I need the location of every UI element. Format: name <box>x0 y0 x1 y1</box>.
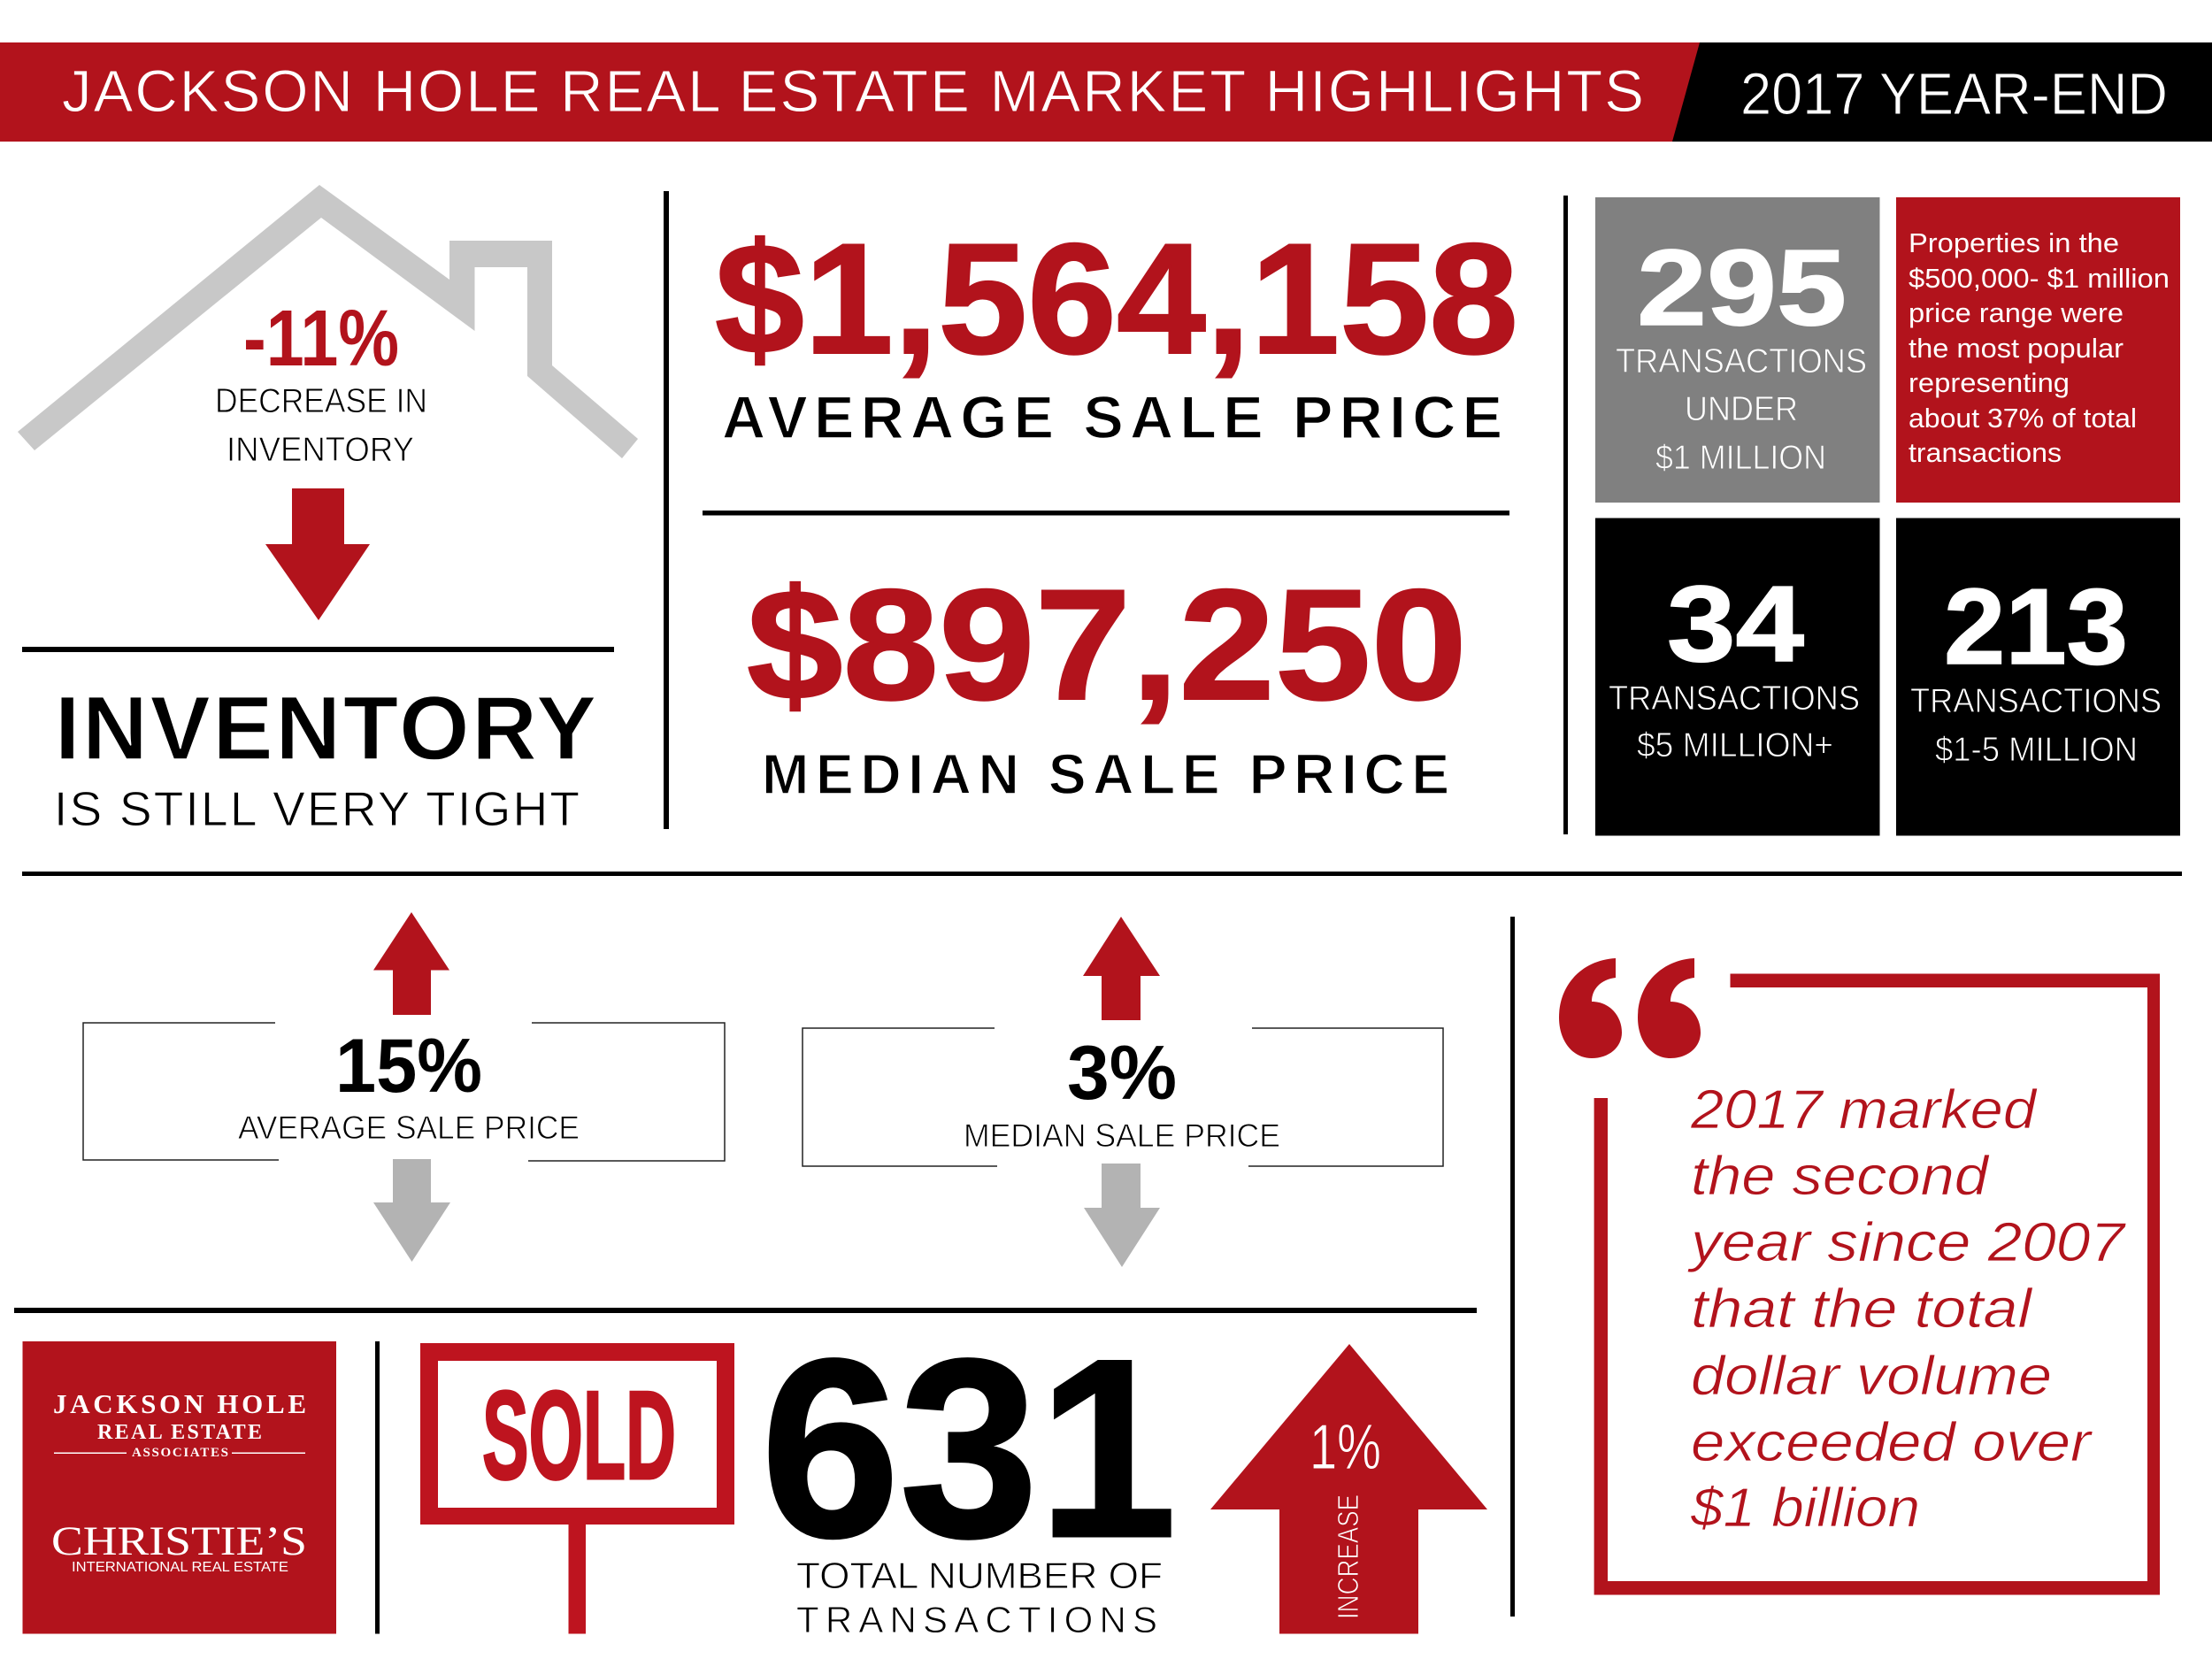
quote frame <box>1594 973 2160 1594</box>
panel: most popular price range: representing <box>1909 367 2070 398</box>
icon: quotation marks <box>1559 958 1701 1058</box>
label: TRANSACTIONS <box>796 1599 1157 1640</box>
panel: inventory <box>18 185 638 836</box>
label: TOTAL NUMBER OF <box>796 1555 1163 1596</box>
panel: transactions under 1 million <box>1595 197 1879 503</box>
panel: sale prices <box>703 211 1518 806</box>
panel: most popular price range: about 37% of total <box>1909 403 2137 434</box>
quote text: the second <box>1691 1146 1991 1207</box>
panel: logos <box>23 1341 336 1633</box>
panel: transactions 1 to 5 million <box>1896 518 2180 835</box>
panel: most popular price range: Properties in the <box>1909 227 2119 258</box>
percentage: 3% <box>1067 1031 1177 1116</box>
decrease label: INVENTORY <box>227 431 414 469</box>
median sale price label: MEDIAN SALE PRICE <box>762 742 1449 806</box>
sold text: SOLD <box>482 1365 676 1506</box>
quote text <box>1687 1079 2127 1539</box>
panel: most popular price range: the most popular <box>1909 333 2124 364</box>
logo: Christie's International Real Estate: INTERNATIONAL REAL ESTATE <box>72 1560 288 1575</box>
quote text: exceeded over <box>1691 1412 2093 1473</box>
icon: house outline <box>18 185 638 458</box>
panel: total transactions <box>761 1306 1177 1640</box>
logo: Jackson Hole Real Estate Associates: JACKSON HOLE <box>53 1388 306 1419</box>
panel: average sale price change <box>83 912 725 1262</box>
one percent: 1% <box>1310 1412 1381 1483</box>
label: MEDIAN SALE PRICE <box>964 1118 1280 1154</box>
quote text: 2017 marked <box>1690 1079 2039 1141</box>
label: TRANSACTIONS <box>1616 342 1867 380</box>
label <box>796 1555 1163 1640</box>
bracket frame <box>803 1028 1443 1166</box>
inventory subheading: IS STILL VERY TIGHT <box>54 781 580 836</box>
decrease label <box>215 382 427 469</box>
label: $1-5 MILLION <box>1935 731 2138 769</box>
number 213: 213 <box>1944 566 2128 687</box>
panel: quote <box>1559 958 2160 1594</box>
icon: large increase arrow <box>1210 1344 1487 1633</box>
icon: red down arrow <box>265 488 370 620</box>
label: UNDER <box>1685 390 1798 428</box>
quote text: dollar volume <box>1691 1346 2052 1407</box>
logo: Jackson Hole Real Estate Associates: ASSOCIATES <box>132 1446 228 1460</box>
label <box>1616 342 1867 477</box>
panel: most popular price range: transactions <box>1909 437 2062 468</box>
panel: most popular price range <box>1896 197 2180 503</box>
icon: red up arrow <box>373 912 449 1015</box>
median sale price value: $897,250 <box>747 557 1467 733</box>
header banner <box>0 42 2212 142</box>
inventory decrease percentage: -11% <box>243 295 399 383</box>
decrease label: DECREASE IN <box>215 382 427 420</box>
label: AVERAGE SALE PRICE <box>238 1110 580 1146</box>
logo: Christie's International Real Estate: CHRISTIE’S <box>51 1518 307 1564</box>
logo: Jackson Hole Real Estate Associates: REAL ESTATE <box>97 1421 262 1444</box>
number 295: 295 <box>1637 227 1847 348</box>
title: JACKSON HOLE REAL ESTATE MARKET HIGHLIGHTS <box>62 58 1644 125</box>
label: $1 MILLION <box>1655 439 1826 477</box>
increase label: INCREASE <box>1332 1494 1364 1619</box>
label: TRANSACTIONS <box>1609 680 1860 718</box>
label <box>1609 680 1860 764</box>
quote text: that the total <box>1691 1279 2034 1340</box>
year label: 2017 YEAR-END <box>1740 61 2168 127</box>
average sale price label: AVERAGE SALE PRICE <box>722 384 1502 451</box>
icon: gray down arrow <box>373 1159 450 1262</box>
number 631: 631 <box>761 1306 1177 1590</box>
label <box>1910 682 2162 769</box>
quote text: $1 billion <box>1690 1478 1920 1539</box>
icon: sold sign <box>420 1343 734 1633</box>
panel: most popular price range: price range were <box>1909 297 2124 328</box>
panel: median sale price change <box>803 917 1443 1267</box>
percentage: 15% <box>335 1024 482 1109</box>
label: TRANSACTIONS <box>1910 682 2162 720</box>
panel: transactions over 5 million <box>1595 518 1879 835</box>
average sale price value: $1,564,158 <box>715 211 1518 387</box>
panel: most popular price range: $500,000- $1 million <box>1909 263 2170 294</box>
label: $5 MILLION+ <box>1637 726 1833 764</box>
inventory heading: INVENTORY <box>55 678 596 779</box>
quote text: year since 2007 <box>1687 1212 2127 1273</box>
icon: red up arrow <box>1083 917 1160 1020</box>
icon: gray down arrow <box>1084 1164 1160 1267</box>
logo: Jackson Hole Real Estate Associates <box>53 1388 306 1460</box>
bracket frame <box>83 1023 725 1161</box>
number 34: 34 <box>1667 564 1804 684</box>
